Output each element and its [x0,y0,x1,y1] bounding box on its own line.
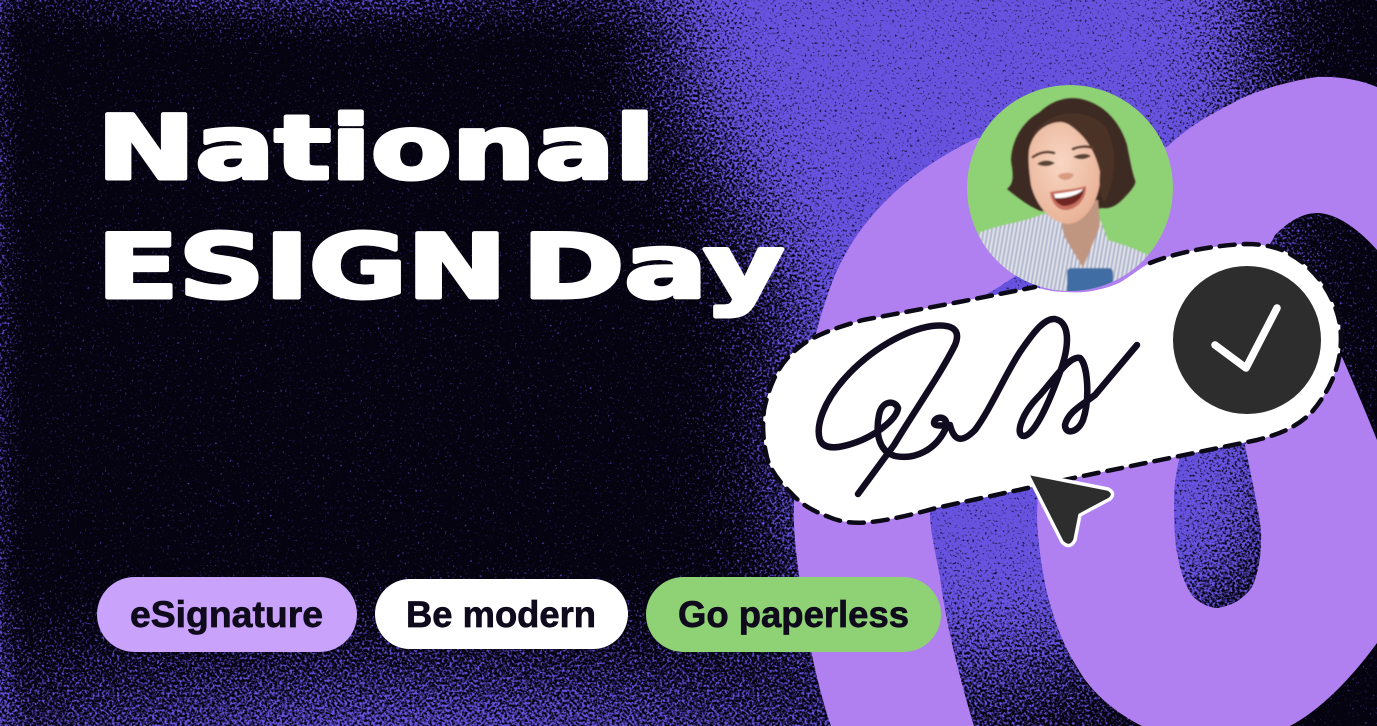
tag: Go paperless: Go paperless [678,594,909,635]
dashed outline [763,244,1341,523]
tag: Go paperless [646,577,941,652]
title: Day [522,216,784,318]
tag: eSignature: eSignature [130,594,323,635]
tag: eSignature [97,577,357,652]
hair fringe [1030,113,1114,201]
tag: Be modern [375,579,628,649]
eyes [1037,154,1091,166]
signature scribble [819,319,1137,494]
title [97,96,784,318]
face [1029,122,1100,224]
lavender loop shape [794,77,1377,726]
green circle backdrop [967,85,1173,291]
nose [1058,173,1074,180]
eyebrows [1033,147,1093,157]
title: National [97,96,655,200]
neck [1058,200,1100,268]
card fill [763,244,1341,523]
shirt [978,214,1148,300]
title: ESIGN [97,216,507,318]
tag: Be modern: Be modern [406,594,596,635]
smile [1050,186,1086,210]
signature card [763,244,1341,523]
photo: smiling woman with phone [967,85,1173,300]
cursor arrow [1027,473,1113,546]
phone [1066,267,1114,291]
check badge [1173,266,1321,414]
hair back [1007,98,1135,212]
